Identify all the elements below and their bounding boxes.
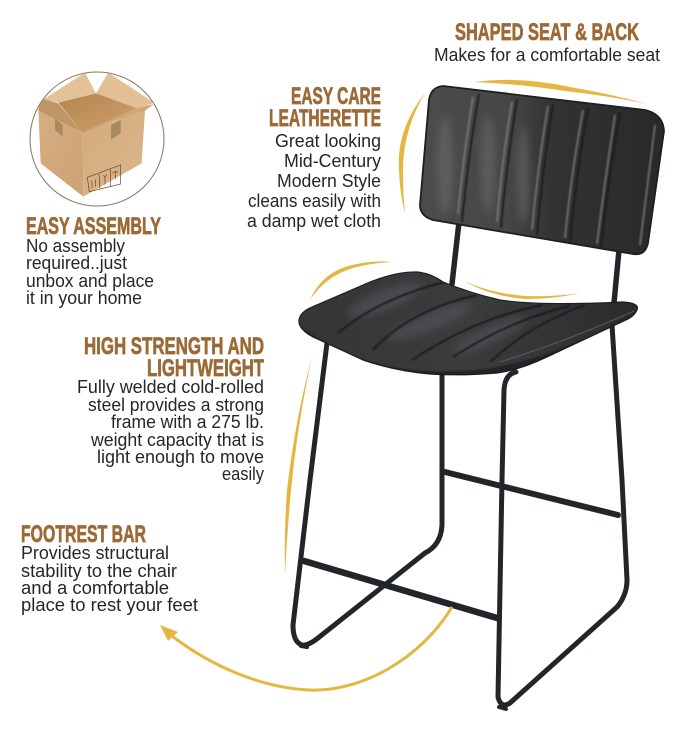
panel: footrest bar — [21, 521, 198, 615]
text: strength description — [77, 377, 264, 484]
text: shaped seat description: Makes for a comfortable seat — [434, 45, 660, 65]
text: strength description: light enough to move — [97, 447, 264, 467]
text: strength description: steel provides a strong — [88, 395, 264, 415]
text: footrest description: and a comfortable — [21, 578, 169, 598]
heading: high strength and lightweight: LIGHTWEIGHT — [147, 355, 264, 382]
text: leatherette description: a damp wet cloth — [247, 211, 381, 231]
text: easy assembly description: required..just — [26, 253, 127, 273]
heading: easy care leatherette: EASY CARE — [291, 83, 381, 110]
panel: easy care leatherette — [247, 83, 381, 231]
text: footrest description: Provides structural — [21, 543, 169, 563]
text: footrest description: stability to the chair — [21, 561, 177, 581]
text: footrest description — [21, 543, 198, 615]
heading: footrest bar: FOOTREST BAR — [21, 521, 146, 548]
heading: high strength and lightweight — [84, 333, 264, 382]
crossbar: rear — [445, 472, 618, 515]
text: easy assembly description: No assembly — [26, 236, 125, 256]
panel: easy assembly — [26, 72, 164, 308]
text: leatherette description: Modern Style — [277, 171, 381, 191]
text: footrest description: place to rest your feet — [21, 595, 198, 615]
heading: easy assembly: EASY ASSEMBLY — [26, 213, 161, 240]
gold accent arcs around the chair — [285, 80, 647, 575]
chair seat — [298, 271, 638, 376]
arrow: footrest callout — [160, 607, 452, 690]
chair frame: legs and uprights — [293, 222, 627, 709]
text: leatherette description: Great looking — [275, 131, 381, 151]
text: strength description: easily — [222, 464, 264, 484]
panel: shaped seat and back — [434, 19, 660, 65]
text: easy assembly description: unbox and place — [26, 271, 154, 291]
text: strength description: weight capacity that is — [90, 430, 264, 450]
text: strength description: frame with a 275 lb. — [111, 412, 264, 432]
chair backrest — [420, 86, 664, 254]
icon: open cardboard box in circle — [30, 72, 164, 206]
text: easy assembly description — [26, 236, 154, 308]
crossbar: footrest — [304, 561, 497, 618]
text: leatherette description — [247, 131, 381, 231]
heading: high strength and lightweight: HIGH STRENGTH AND — [84, 333, 264, 360]
text: strength description: Fully welded cold-rolled — [77, 377, 264, 397]
panel: high strength and lightweight — [77, 333, 264, 484]
heading: easy care leatherette: LEATHERETTE — [269, 105, 381, 132]
text: easy assembly description: it in your home — [26, 288, 142, 308]
chair — [293, 86, 664, 709]
heading: easy care leatherette — [269, 83, 381, 132]
text: leatherette description: Mid-Century — [284, 151, 381, 171]
text: leatherette description: cleans easily with — [248, 191, 381, 211]
